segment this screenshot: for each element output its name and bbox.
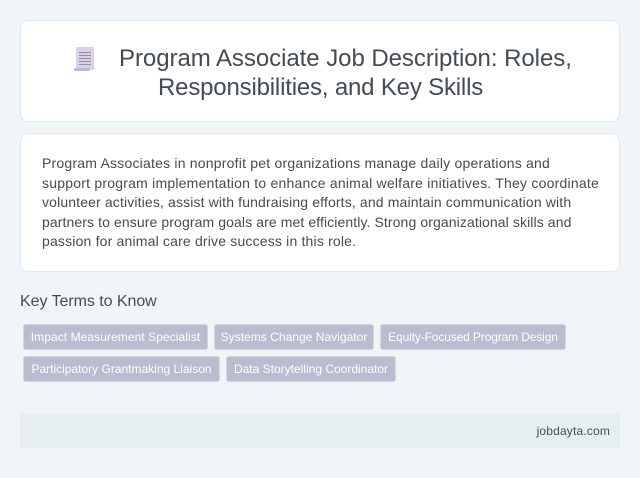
heading: Program Associate Job Description: Roles, — [119, 45, 572, 72]
footer bar — [20, 414, 620, 448]
tag list — [23, 324, 566, 382]
tag: Participatory Grantmaking Liaison — [31, 362, 212, 376]
tag — [226, 356, 396, 382]
panel: title card — [20, 20, 620, 122]
heading: key terms: Key Terms to Know — [20, 293, 157, 310]
text block: description: partners to ensure program goals are met efficiently. Strong organizational skills and — [42, 214, 571, 230]
tag: Impact Measurement Specialist — [31, 330, 200, 344]
tag: Systems Change Navigator — [221, 330, 367, 344]
tag: Equity-Focused Program Design — [388, 330, 558, 344]
text block: description — [42, 155, 599, 249]
icon: document scroll — [74, 47, 94, 71]
tag — [380, 324, 566, 350]
footer text: jobdayta.com — [537, 424, 610, 438]
tag — [23, 324, 208, 350]
text block: description: support program implementation to enhance animal welfare initiatives. They coordinate — [42, 175, 599, 191]
heading: Responsibilities, and Key Skills — [158, 74, 483, 101]
heading — [119, 45, 572, 101]
tag — [214, 324, 374, 350]
tag: Data Storytelling Coordinator — [234, 362, 388, 376]
tag — [23, 356, 220, 382]
panel: description card — [20, 133, 620, 272]
text block: description: Program Associates in nonprofit pet organizations manage daily operations and — [42, 155, 550, 171]
text block: description: volunteer activities, assist with fundraising efforts, and maintain communication with — [42, 194, 571, 210]
text block: description: passion for animal care drive success in this role. — [42, 233, 356, 249]
